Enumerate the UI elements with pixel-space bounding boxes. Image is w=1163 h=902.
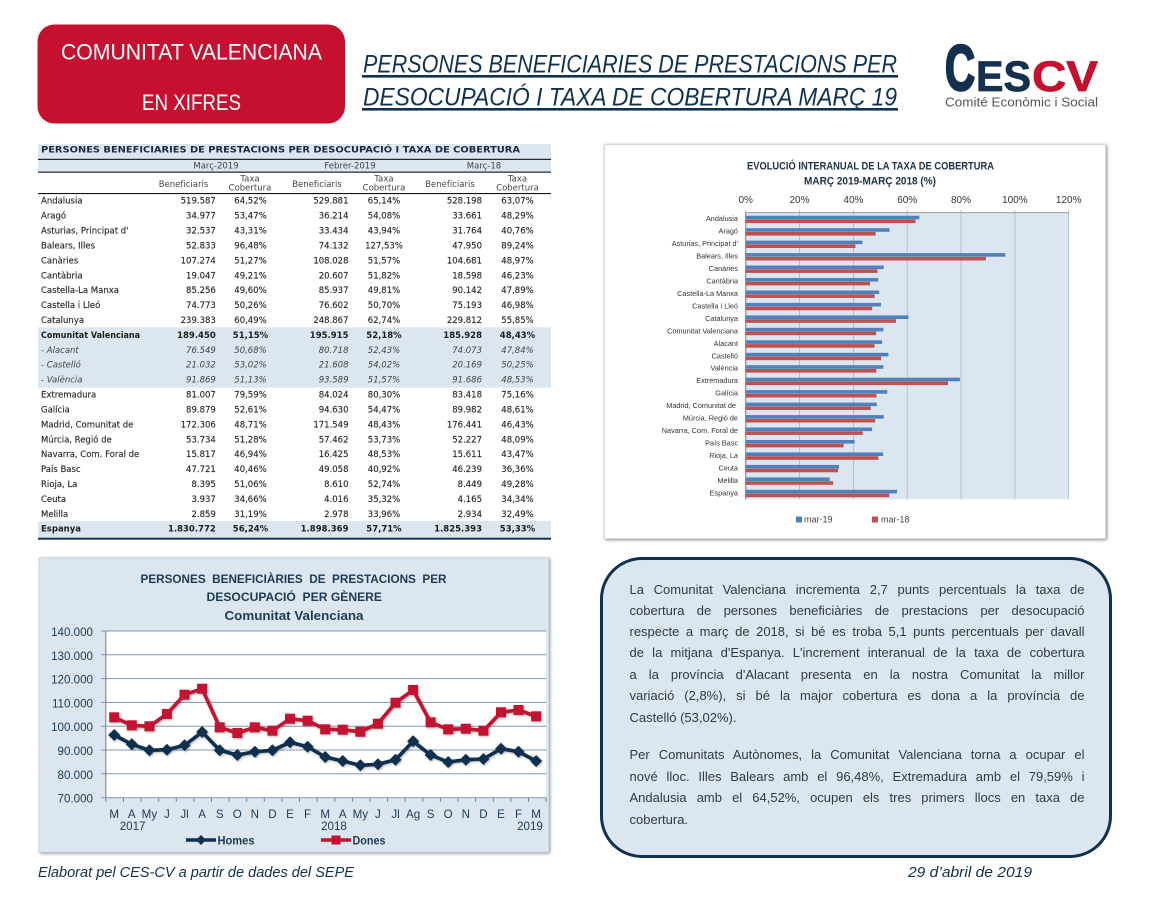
table rows: 1.898.369 [301,525,349,535]
table rows: 185.928 [443,331,482,341]
table rows: 40,76% [501,226,534,236]
panel: bar chart, coverage rate evolution: Castelló [712,351,738,360]
table rows: 43,31% [234,226,267,236]
panel: bar chart, coverage rate evolution: País Basc [705,438,738,448]
panel: bar chart, coverage rate evolution: Asturias, Principat d' [672,239,739,248]
table rows: 75.193 [452,301,482,311]
bar chart title: EVOLUCIÓ INTERANUAL DE LA TAXA DE COBERTURA [747,159,994,172]
table rows: 54,08% [368,212,400,222]
bar chart legend: mar-19 [804,515,833,525]
bar chart top axis labels: 60% [897,195,917,206]
table rows: 50,26% [234,301,267,311]
table rows: 127,53% [365,241,403,251]
panel: bar chart, coverage rate evolution: Alacant [714,339,738,348]
table rows: 94.630 [319,405,348,415]
line chart title: PERSONES BENEFICIÀRIES DE PRESTACIONS PER [140,571,447,586]
table rows: Galícia [41,405,70,415]
table rows: 53,33% [500,525,536,535]
x axis labels: J [164,808,170,821]
bar chart legend: mar-18 [881,515,910,525]
y axis labels: 70.000 [58,793,93,806]
panel: bar chart, coverage rate evolution: Múrcia, Regió de [683,414,738,423]
table column headers: Beneficiaris [292,180,342,190]
table rows: Cantàbria [41,271,83,281]
x axis labels: M [109,808,119,821]
table rows: 60,49% [234,316,267,326]
table rows: 53,73% [368,435,400,445]
table rows: 57.462 [319,435,348,445]
table column headers: Taxa [373,174,394,184]
table column headers: Febrer-2019 [324,162,376,172]
table rows: 48,43% [368,420,400,430]
table rows: 52.833 [186,241,216,251]
x axis labels: M [531,808,541,821]
x axis labels: 2017 [120,820,145,833]
table rows: Canàries [41,256,79,266]
table rows: Castella i Lleó [41,300,100,311]
table rows: 48,71% [234,420,267,430]
y axis labels: 120.000 [51,674,93,687]
x axis labels: O [444,808,453,821]
line chart legend: Dones [352,833,386,847]
text block: commentary: Andalusia amb el 64,52%, ocupen els tres primers llocs en taxa de [630,790,1084,805]
table rows: 52,43% [368,346,400,356]
table rows: 40,92% [368,465,400,475]
y axis labels: 140.000 [51,626,93,639]
y axis labels: 130.000 [51,650,93,663]
table rows: 89,24% [501,241,534,251]
line chart title: DESOCUPACIÓ PER GÈNERE [206,589,382,604]
table rows: 83.418 [452,390,482,400]
x axis labels: E [497,808,505,821]
table rows: 76.602 [319,301,348,311]
table rows: 50,25% [501,361,534,371]
table rows: 49,81% [368,286,400,296]
table rows: 34.977 [186,212,216,222]
y axis labels [51,626,93,806]
panel: bar chart, coverage rate evolution: Castella i Lleó [692,301,738,310]
table rows: 96,48% [234,241,267,251]
table rows: 36.214 [319,212,348,222]
table rows: 89.982 [452,405,482,415]
table rows: 76.549 [186,346,216,356]
table rows: 2.934 [458,510,482,520]
series: Dones [114,689,536,733]
table rows: 48,53% [501,376,534,386]
bar chart top axis labels: 80% [951,195,971,206]
table rows: 62,74% [368,316,400,326]
table rows: 51,15% [233,331,269,341]
table rows: 46,23% [501,271,534,281]
table rows: - Castelló [41,360,81,371]
text block: commentary: cobertura de persones beneficiàries de prestacions per desocupació [630,603,1084,618]
bar chart title [747,159,994,187]
table rows: 3.937 [191,495,216,505]
table rows: 229.812 [447,316,482,326]
table rows: Navarra, Com. Foral de [41,450,139,460]
bar chart top axis labels: 100% [1002,195,1028,206]
table rows: 176.441 [447,420,482,430]
panel: bar chart, coverage rate evolution: Melilla [717,476,739,485]
panel: bar chart, coverage rate evolution: Ceuta [719,463,739,472]
text block: commentary: Per Comunitats Autònomes, la Comunitat Valenciana torna a ocupar el [630,747,1084,762]
panel: bar chart, coverage rate evolution: Castella-La Manxa [677,289,739,298]
table column headers: Cobertura [363,184,405,194]
table rows: 33.434 [319,226,348,236]
table column headers: Març-18 [467,162,501,172]
table rows: 49,28% [501,480,534,490]
table rows: 47,89% [501,286,534,296]
text block: commentary: a la província d'Alacant presenta en la nostra Comunitat la millor [630,666,1084,682]
table rows: 47,84% [501,346,534,356]
panel: bar chart, coverage rate evolution: Canàries [709,264,738,273]
table rows [41,197,536,535]
table rows: 52,61% [234,405,267,415]
table rows: 74.773 [186,301,216,311]
x axis labels: D [268,808,277,821]
table rows: 51,27% [234,256,267,266]
table rows: 46,98% [501,301,534,311]
text block: commentary [600,557,1112,858]
heading badge: Comunitat Valenciana en xifres: EN XIFRES [142,90,241,115]
panel: bar chart, coverage rate evolution [604,144,1106,538]
x axis labels: E [286,808,294,821]
x axis labels: My [142,808,157,821]
table rows: 55,85% [501,316,534,326]
text block: commentary: nové lloc. Illes Balears amb el 96,48%, Extremadura amb el 79,59% i [630,769,1084,784]
line chart title: Comunitat Valenciana [224,609,365,623]
table rows: 53,47% [234,212,267,222]
table rows: 43,47% [501,450,534,460]
table rows: 172.306 [181,420,216,430]
table rows: 47.950 [452,241,482,251]
table rows: Múrcia, Regió de [41,434,112,445]
table rows: 50,70% [368,301,400,311]
table rows: 49,21% [234,271,267,281]
table rows: 85.937 [319,286,348,296]
main title: DESOCUPACIÓ I TAXA DE COBERTURA MARÇ 19 [363,82,897,112]
table rows: Balears, Illes [41,241,96,251]
table rows: 49,60% [234,286,267,296]
table rows: 47.721 [186,465,216,475]
table rows: 51,13% [234,376,267,386]
x axis labels: N [462,808,470,821]
table rows: 4.016 [324,495,348,505]
panel: bar chart, coverage rate evolution: Extremadura [696,376,739,385]
table rows: 4.165 [458,495,482,505]
table rows: Catalunya [41,316,84,326]
panel: bar chart, coverage rate evolution: Comunitat Valenciana [667,326,739,335]
table rows: 20.169 [452,361,482,371]
text block: commentary: de la mitjana d'Espanya. L'increment interanual de la taxa de cobertura [630,645,1084,660]
table rows: 15.611 [452,450,482,460]
x axis labels: O [233,808,242,821]
table rows: 84.024 [319,390,348,400]
y axis labels: 90.000 [58,745,93,758]
table rows: Asturias, Principat d' [41,226,128,236]
table rows: 48,29% [501,212,534,222]
x axis labels: S [216,808,224,821]
x axis labels: Jl [180,808,189,821]
table rows: 195.915 [310,331,349,341]
table rows: 46,43% [501,420,534,430]
table rows: 35,32% [368,495,400,505]
table rows: 31,19% [234,510,267,520]
table rows: Castella-La Manxa [41,286,119,296]
table column headers: Cobertura [229,184,271,194]
y axis labels: 100.000 [51,721,93,734]
table rows: 34,34% [501,495,534,505]
table rows: Madrid, Comunitat de [41,420,133,430]
table rows: Andalusia [41,197,83,207]
panel: line chart by gender [40,558,548,852]
source note: Elaborat pel CES-CV a partir de dades del SEPE [38,864,355,881]
table rows: 52.227 [452,435,482,445]
table rows: 65,14% [368,197,400,207]
table rows: 49.058 [319,465,348,475]
heading badge: Comunitat Valenciana en xifres [38,24,345,124]
logo: CES-CV [945,32,1098,110]
x axis labels: A [128,808,136,821]
table rows: 81.007 [186,390,216,400]
table column headers: Cobertura [496,184,539,194]
table rows: 8.610 [324,480,348,490]
table rows: 16.425 [319,450,348,460]
table rows: Rioja, La [41,480,77,490]
y axis labels: 80.000 [58,769,93,782]
logo: CES-CV: CV [1032,53,1098,101]
table rows: 2.859 [191,510,216,520]
table rows: 19.047 [186,271,216,281]
table rows: 63,07% [501,197,534,207]
table rows: 51,57% [368,376,400,386]
text block: commentary: cobertura. [630,812,688,827]
bar chart top axis labels: 20% [789,195,810,206]
table rows: Comunitat Valenciana [41,331,140,341]
table rows: 33.661 [452,212,482,222]
table rows: 43,94% [368,226,400,236]
table rows: 80,30% [368,390,400,400]
text block: commentary: Castelló (53,02%). [630,710,736,725]
table rows: 2.978 [324,510,348,520]
bar chart top axis labels: 0% [738,195,753,206]
table rows: 53,02% [234,361,267,371]
table column headers: Taxa [507,174,527,184]
panel: bar chart, coverage rate evolution: Aragó [719,227,738,236]
logo: CES-CV: C [945,32,975,104]
table rows: 8.395 [191,480,216,490]
table rows: Extremadura [41,390,96,400]
table rows: 31.764 [452,226,482,236]
table: beneficiaries and coverage rate [38,144,551,540]
table rows: - València [41,375,82,386]
x axis labels: My [353,808,368,821]
panel: bar chart, coverage rate evolution: Rioja, La [709,451,739,460]
text block: commentary: variació (2,8%), si bé la major cobertura es dona a la província de [630,688,1084,703]
table rows: 74.132 [319,241,348,251]
table rows: 21.032 [186,361,216,371]
x axis labels: D [479,808,488,821]
table rows: 74.073 [452,346,482,356]
x axis labels: Ag [406,808,420,821]
table rows: 108.028 [313,256,348,266]
series: Homes [114,732,536,765]
table rows: 32,49% [501,510,534,520]
x axis labels: A [339,808,347,821]
table rows: 91.869 [186,376,216,386]
table rows: 528.198 [447,197,482,207]
table title: PERSONES BENEFICIARIES DE PRESTACIONS PER DESOCUPACIÓ I TAXA DE COBERTURA [41,144,521,156]
table rows: 75,16% [501,390,534,400]
bar chart legend [796,515,910,525]
bar chart top axis labels: 120% [1056,195,1082,206]
table rows: 18.598 [452,271,482,281]
table rows: 15.817 [186,450,216,460]
text block: commentary: La Comunitat Valenciana incrementa 2,7 punts percentuals la taxa de [630,582,1084,596]
table rows: 1.825.393 [434,525,482,535]
main title [362,50,898,112]
logo: CES-CV: Comité Econòmic i Social [945,96,1098,110]
table rows: 56,24% [233,525,269,535]
x axis labels: A [198,808,206,821]
x axis labels: F [515,808,522,821]
bar chart top axis labels [738,195,1082,206]
table rows: 46.239 [452,465,482,475]
table rows: 48,97% [501,256,534,266]
table rows: 54,02% [368,361,400,371]
panel: bar chart, coverage rate evolution: Balears, Illes [696,252,738,261]
table rows: 171.549 [313,420,348,430]
table rows: - Alacant [41,346,79,356]
table rows: 51,82% [368,271,400,281]
table rows: 52,74% [368,480,400,490]
panel: bar chart, coverage rate evolution: Catalunya [705,314,739,323]
table rows: 189.450 [177,331,216,341]
table rows: 52,18% [366,331,402,341]
logo: CES-CV: ES [976,53,1031,101]
table rows: 51,06% [234,480,267,490]
panel: bar chart, coverage rate evolution: Navarra, Com. Foral de [662,426,738,435]
x axis labels: F [304,808,311,821]
table rows: 46,94% [234,450,267,460]
table rows: 48,09% [501,435,534,445]
table rows: 79,59% [234,390,267,400]
table rows: Ceuta [41,495,66,505]
table rows: 36,36% [501,465,534,475]
line chart title [140,571,447,623]
table rows: 85.256 [186,286,216,296]
table column headers: Beneficiaris [425,180,475,190]
table rows: 20.607 [319,271,348,281]
table rows: 107.274 [181,256,216,266]
date: 29 d’abril de 2019 [907,864,1033,881]
table rows: 104.681 [447,256,482,266]
table rows: 8.449 [458,480,482,490]
x axis labels: 2018 [321,820,347,833]
table rows: País Basc [41,465,81,475]
table column headers: Taxa [239,174,260,184]
table rows: 93.589 [319,376,348,386]
panel: bar chart, coverage rate evolution: Andalusia [706,214,739,223]
table rows: 57,71% [366,525,402,535]
x axis labels: 2019 [517,820,543,833]
bar chart title: MARÇ 2019-MARÇ 2018 (%) [804,175,936,187]
table rows: 89.879 [186,405,216,415]
panel: bar chart, coverage rate evolution: València [711,364,739,373]
table rows: Melilla [41,510,68,520]
x axis labels: N [251,808,259,821]
x axis labels [109,808,543,833]
table column headers: Març-2019 [193,162,239,172]
table rows: 48,53% [368,450,400,460]
table rows: 64,52% [234,197,267,207]
table rows: 50,68% [234,346,267,356]
table rows: 48,43% [500,331,536,341]
table rows: 80.718 [319,346,349,356]
table rows: 34,66% [234,495,267,505]
y axis labels: 110.000 [52,697,93,710]
table rows: 248.867 [313,316,348,326]
panel: bar chart, coverage rate evolution: Espanya [710,488,739,497]
table column headers: Beneficiaris [159,180,209,190]
table rows: 239.383 [181,316,216,326]
x axis labels: S [427,808,435,821]
panel: bar chart, coverage rate evolution: Madrid, Comunitat de [666,401,736,410]
table rows: 32.537 [186,226,216,236]
bar chart top axis labels: 40% [843,195,864,206]
panel: bar chart, coverage rate evolution: Galícia [715,389,739,398]
table rows: 51,57% [368,256,400,266]
table rows: 21.608 [319,361,349,371]
table rows: 48,61% [501,405,534,415]
table rows: 519.587 [181,197,216,207]
table rows: Espanya [41,525,81,535]
x axis labels: M [320,808,330,821]
main title: PERSONES BENEFICIARIES DE PRESTACIONS PER [363,50,897,78]
line chart legend: Homes [218,833,255,847]
line chart legend [186,833,386,847]
table rows: 90.142 [452,286,482,296]
table column headers [159,162,539,194]
table rows: 529.881 [313,197,348,207]
table rows: 1.830.772 [168,525,216,535]
panel: bar chart, coverage rate evolution: Cantàbria [706,276,739,286]
heading badge: Comunitat Valenciana en xifres: COMUNITAT VALENCIANA [61,40,322,64]
table rows: 51,28% [234,435,267,445]
table rows: 40,46% [234,465,267,475]
table rows: 53.734 [186,435,216,445]
x axis labels: J [375,808,381,821]
table rows: 54,47% [368,405,400,415]
table rows: 91.686 [452,376,483,386]
x axis labels: Jl [391,808,400,821]
table rows: 33,96% [368,510,400,520]
text block: commentary: respecte a març de 2018, si bé es troba 5,1 punts percentuals per davall [630,624,1084,639]
table rows: Aragó [41,211,66,222]
